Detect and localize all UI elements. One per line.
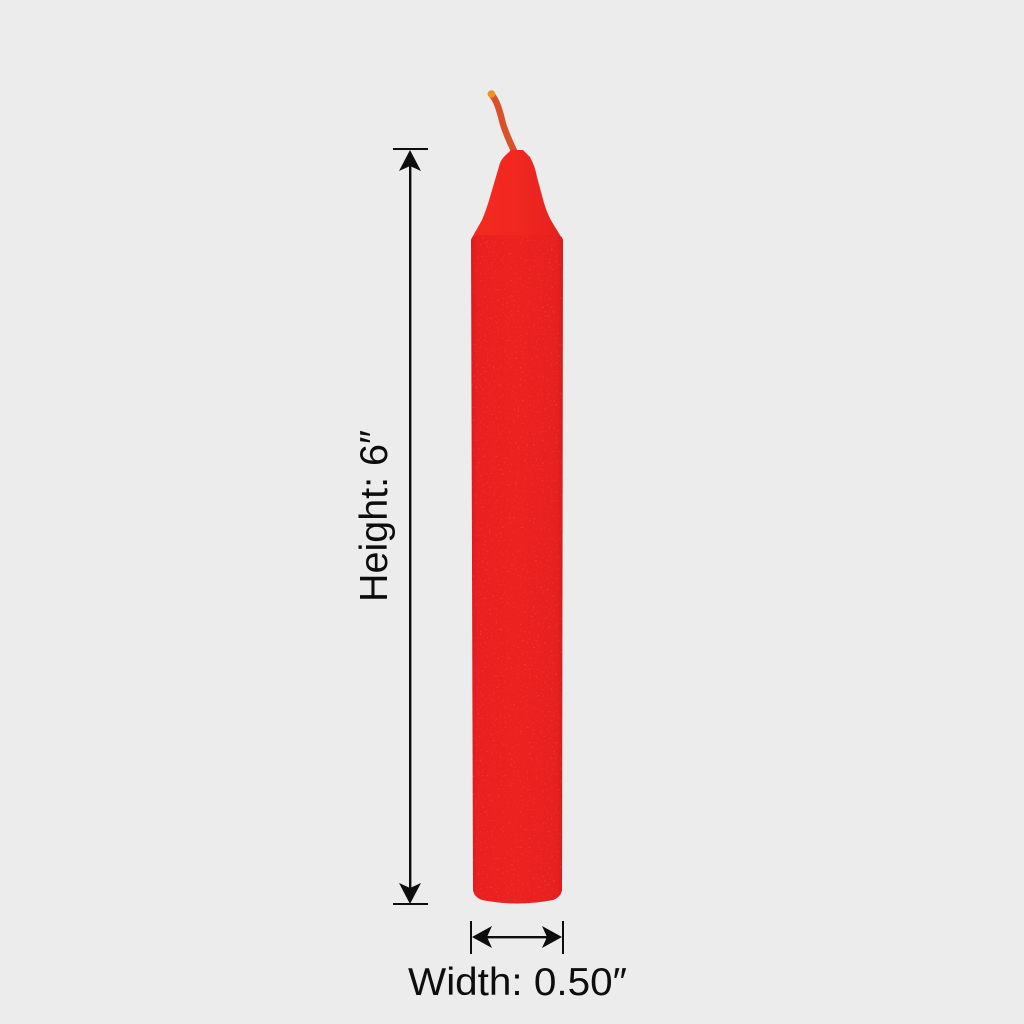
infographic: candle dimensions xyxy=(358,90,626,996)
height dimension arrow xyxy=(393,148,428,905)
width label: Width: 0.50″ xyxy=(408,961,627,1004)
icon: red candle xyxy=(470,90,564,905)
candle wick xyxy=(488,90,514,151)
candle body xyxy=(471,235,563,904)
width dimension arrow xyxy=(470,921,564,954)
height label: Height: 6″ xyxy=(353,430,396,602)
candle tip xyxy=(471,150,563,240)
candle surface texture xyxy=(470,235,564,905)
